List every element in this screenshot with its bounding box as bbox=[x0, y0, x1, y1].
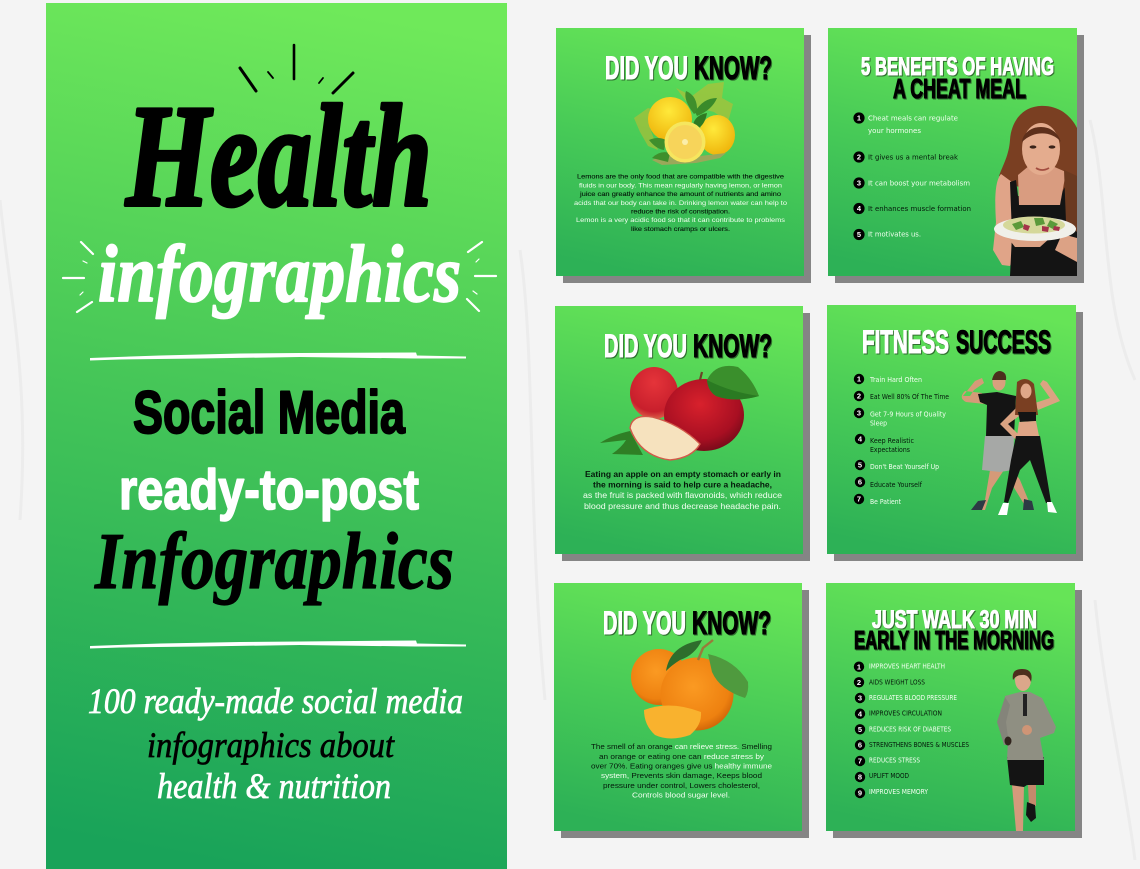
numbered list: 4 bbox=[857, 204, 862, 213]
icon: black sparks above heading bbox=[240, 45, 353, 93]
numbered list: Expectations bbox=[870, 446, 910, 454]
heading: A CHEAT MEAL bbox=[893, 73, 1026, 104]
numbered list: REGULATES BLOOD PRESSURE bbox=[869, 694, 957, 702]
body text: over 70%. Eating oranges give us healthy immune bbox=[591, 762, 772, 770]
numbered list: Cheat meals can regulate bbox=[868, 114, 958, 122]
numbered list: Don't Beat Yourself Up bbox=[870, 463, 939, 471]
icon: oranges bbox=[631, 640, 748, 738]
heading: DID YOU bbox=[603, 605, 686, 641]
numbered list: 3 bbox=[857, 409, 861, 418]
heading: FITNESS bbox=[862, 324, 949, 360]
numbered list: REDUCES RISK OF DIABETES bbox=[869, 725, 951, 733]
heading bbox=[861, 53, 1054, 104]
numbered list: Get 7-9 Hours of Quality bbox=[870, 410, 946, 418]
body text: pressure under control, Lowers cholesterol, bbox=[603, 781, 760, 790]
numbered list: 1 bbox=[857, 662, 861, 671]
numbered list: 7 bbox=[858, 757, 862, 766]
numbered list: 4 bbox=[858, 709, 863, 718]
heading: ready-to-post: ready-to-post bbox=[119, 458, 419, 522]
body text: The smell of an orange can relieve stress. Smelling bbox=[591, 742, 772, 751]
heading: Social Media: Social Media bbox=[133, 379, 405, 446]
numbered list: 9 bbox=[858, 789, 862, 798]
numbered list: 7 bbox=[857, 495, 861, 504]
numbered list bbox=[853, 112, 971, 240]
numbered list: your hormones bbox=[868, 127, 921, 135]
numbered list bbox=[854, 662, 969, 798]
body text bbox=[591, 742, 772, 800]
numbered list: It motivates us. bbox=[868, 230, 921, 238]
numbered list: IMPROVES CIRCULATION bbox=[869, 710, 942, 718]
body text: reduce the risk of constipation. bbox=[631, 208, 730, 216]
heading: Infographics: Infographics bbox=[94, 518, 454, 606]
heading: KNOW? bbox=[693, 328, 772, 364]
numbered list: REDUCES STRESS bbox=[869, 756, 920, 764]
numbered list: 3 bbox=[858, 694, 862, 703]
numbered list: Educate Yourself bbox=[870, 481, 923, 489]
body text: juice can greatly enhance the amount of nutrients and amino bbox=[579, 191, 781, 198]
numbered list: IMPROVES HEART HEALTH bbox=[869, 663, 945, 671]
numbered list: 2 bbox=[857, 678, 861, 687]
body text bbox=[574, 174, 787, 233]
body text: fluids in our body. This mean regularly having lemon, or lemon bbox=[579, 182, 782, 189]
numbered list: 1 bbox=[857, 375, 861, 384]
numbered list: It enhances muscle formation bbox=[868, 205, 971, 213]
body text: Lemons are the only food that are compatible with the digestive bbox=[577, 174, 784, 181]
description text: 100 ready-made social media bbox=[88, 681, 463, 721]
panel: fitness card bbox=[827, 305, 1083, 561]
numbered list: 6 bbox=[858, 478, 862, 487]
body text: blood pressure and thus decrease headache pain. bbox=[584, 502, 781, 511]
icon: lemons bbox=[634, 82, 735, 165]
panel: main cover bbox=[46, 3, 507, 869]
numbered list: 5 bbox=[858, 461, 862, 470]
numbered list: IMPROVES MEMORY bbox=[869, 788, 929, 796]
heading: DID YOU bbox=[604, 328, 687, 364]
icon: white sparks beside infographics bbox=[63, 242, 496, 312]
panel: morning walk card bbox=[826, 583, 1082, 838]
heading: KNOW? bbox=[692, 605, 771, 641]
body text: like stomach cramps or ulcers. bbox=[631, 226, 730, 233]
icon: woman holding salad plate bbox=[993, 106, 1077, 276]
heading: JUST WALK 30 MIN bbox=[872, 606, 1037, 634]
numbered list: It can boost your metabolism bbox=[868, 180, 970, 188]
numbered list: STRENGTHENS BONES & MUSCLES bbox=[869, 741, 969, 749]
body text: the morning is said to help cure a headache, bbox=[593, 480, 772, 490]
body text: system, Prevents skin damage, Keeps blood bbox=[601, 771, 762, 780]
heading bbox=[854, 606, 1054, 655]
numbered list: AIDS WEIGHT LOSS bbox=[869, 678, 925, 686]
numbered list: 6 bbox=[858, 741, 862, 750]
numbered list: 2 bbox=[857, 392, 861, 401]
heading: DID YOU bbox=[605, 50, 688, 86]
numbered list: 5 bbox=[858, 725, 862, 734]
numbered list: Keep Realistic bbox=[870, 437, 914, 445]
body text: as the fruit is packed with flavonoids, which reduce bbox=[583, 491, 783, 500]
heading: SUCCESS bbox=[956, 324, 1051, 360]
body text bbox=[583, 470, 783, 511]
numbered list: Eat Well 80% Of The Time bbox=[870, 393, 949, 401]
body text: Controls blood sugar level. bbox=[632, 790, 730, 800]
heading: Health: Health bbox=[125, 75, 432, 237]
icon: fitness couple bbox=[962, 371, 1060, 515]
panel: cheat meal card bbox=[828, 28, 1084, 283]
heading: KNOW? bbox=[694, 50, 772, 86]
body text: Eating an apple on an empty stomach or early in bbox=[585, 470, 781, 479]
numbered list: Be Patient bbox=[870, 498, 901, 506]
heading: infographics: infographics bbox=[98, 228, 461, 319]
numbered list bbox=[854, 374, 949, 506]
numbered list: Train Hard Often bbox=[869, 376, 922, 384]
underline stroke bbox=[90, 352, 466, 360]
numbered list: 2 bbox=[857, 153, 861, 162]
body text: an orange or eating one can reduce stress by bbox=[599, 752, 764, 761]
panel: apple card bbox=[555, 306, 810, 561]
numbered list: 5 bbox=[857, 230, 861, 239]
numbered list: 1 bbox=[857, 114, 861, 123]
body text: acids that our body can take in. Drinking lemon water can help to bbox=[574, 200, 787, 207]
numbered list: 3 bbox=[857, 179, 861, 188]
icon: apples bbox=[600, 366, 759, 460]
icon: running man bbox=[997, 669, 1056, 831]
numbered list: UPLIFT MOOD bbox=[869, 772, 909, 780]
description text: infographics about bbox=[147, 725, 395, 765]
underline stroke bbox=[90, 640, 466, 648]
numbered list: 4 bbox=[858, 435, 863, 444]
numbered list: Sleep bbox=[870, 420, 887, 428]
description text: health & nutrition bbox=[157, 766, 391, 806]
panel: orange card bbox=[554, 583, 809, 838]
numbered list: 8 bbox=[858, 773, 862, 782]
body text: Lemon is a very acidic food so that it can contribute to problems bbox=[576, 217, 786, 224]
panel: lemon card bbox=[556, 28, 811, 283]
numbered list: It gives us a mental break bbox=[868, 154, 958, 162]
description text bbox=[88, 681, 463, 806]
